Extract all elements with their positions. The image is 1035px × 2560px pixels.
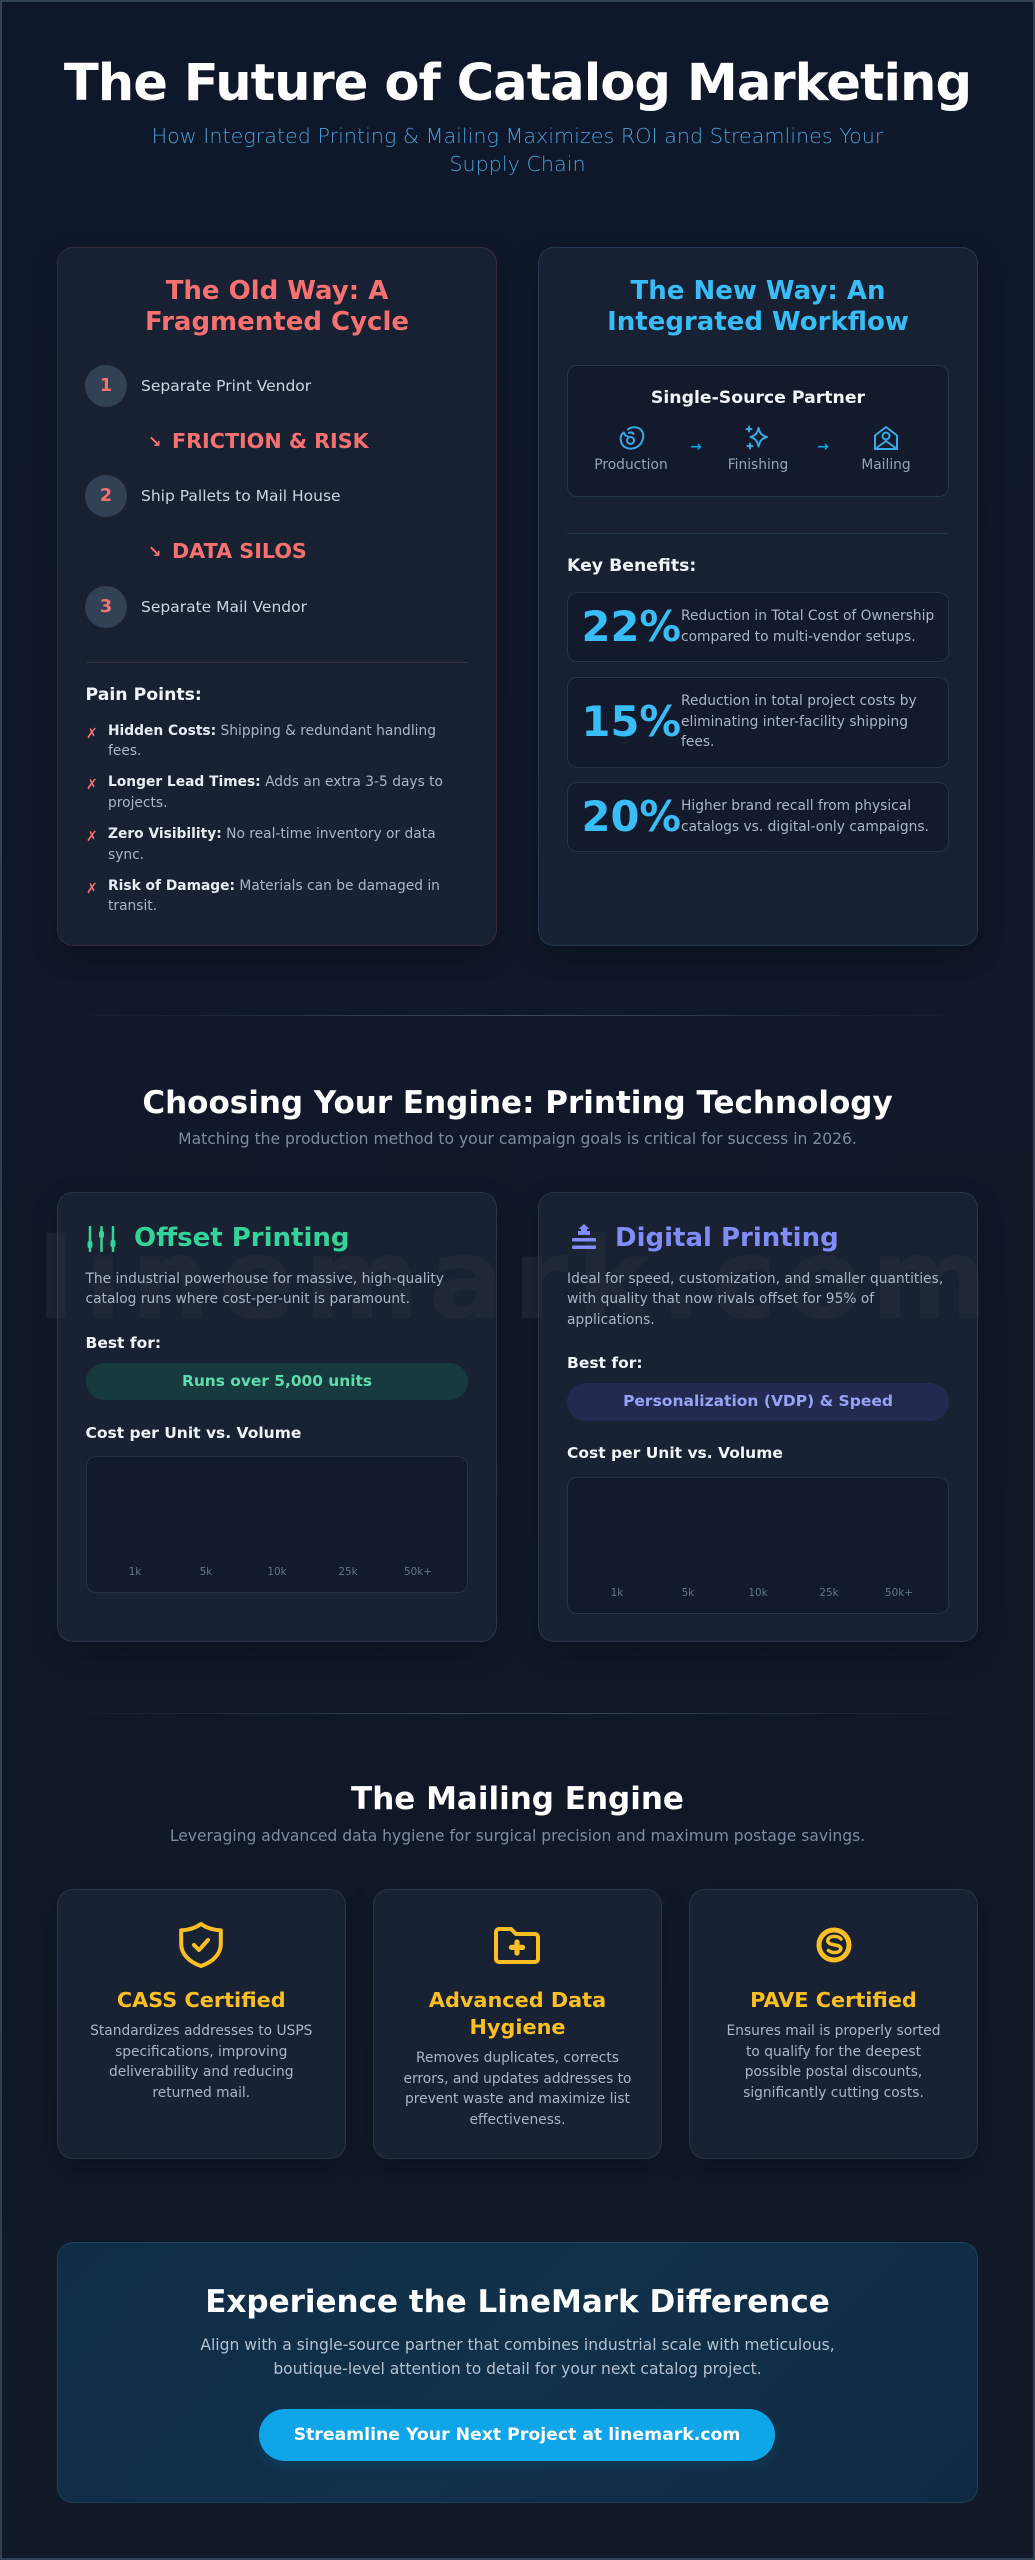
subtitle (152, 124, 884, 176)
cass description: returned mail. (152, 2085, 250, 2101)
section subheading: Leveraging advanced data hygiene for surgical precision and maximum postage savings. (170, 1826, 865, 1844)
icon: sliders (88, 1226, 116, 1252)
description (681, 608, 934, 645)
cta heading: Experience the LineMark Difference (205, 2284, 830, 2320)
hygiene heading (429, 1988, 606, 2039)
panel: pave certified (689, 1889, 978, 2159)
best for pill (567, 1383, 949, 1421)
description: compared to multi-vendor setups. (681, 629, 916, 645)
pain point: lead times: Longer Lead Times: Adds an extra 3-5 days to (108, 774, 443, 790)
digital description: Ideal for speed, customization, and smaller quantities, (567, 1271, 943, 1287)
pave description: to qualify for the deepest (746, 2044, 921, 2060)
axis labels: 50k+ (885, 1587, 913, 1599)
watermark: linemark.com (37, 1215, 996, 1345)
arrow 2: → (817, 439, 829, 455)
panel: cass certified (57, 1889, 346, 2159)
key benefits heading: Key Benefits: (567, 556, 696, 576)
stat: 20% (567, 782, 949, 852)
description: Higher brand recall from physical (681, 798, 911, 814)
friction callout: ↘ (148, 432, 161, 450)
best for pill: Personalization (VDP) & Speed (623, 1392, 893, 1410)
pain point: lead times: projects. (108, 795, 167, 811)
cass description (90, 2023, 312, 2101)
section heading: mailing engine: The Mailing Engine (351, 1781, 684, 1817)
panel: the old way (57, 247, 497, 946)
pain point: hidden costs: ✗ (86, 726, 98, 742)
panel: data hygiene (373, 1889, 662, 2159)
step 1 badge (85, 365, 127, 407)
step 2 label: Ship Pallets to Mail House (141, 487, 341, 505)
description (681, 693, 917, 750)
icon: stamp (572, 1224, 596, 1249)
arrow 1: → (690, 439, 702, 455)
friction callout: FRICTION & RISK (172, 428, 369, 452)
axis labels: 25k (819, 1587, 839, 1599)
digital heading: Digital Printing (615, 1223, 839, 1253)
cta text (200, 2336, 835, 2378)
description: eliminating inter-facility shipping (681, 714, 908, 730)
new way heading: The New Way: An (631, 276, 885, 306)
description: Reduction in total project costs by (681, 693, 917, 709)
offset description: catalog runs where cost-per-unit is paramount. (86, 1291, 410, 1307)
label: finishing: Finishing (728, 457, 788, 473)
description: fees. (681, 734, 714, 750)
offset description: The industrial powerhouse for massive, high-quality (86, 1271, 444, 1287)
pain point: damage: Risk of Damage: Materials can be damaged in (108, 878, 440, 894)
best for pill: Runs over 5,000 units (182, 1372, 372, 1390)
chart heading: Cost per Unit vs. Volume (567, 1444, 783, 1462)
label: mailing: Mailing (861, 457, 911, 473)
pave description: Ensures mail is properly sorted (726, 2023, 940, 2039)
pain point: damage: transit. (108, 898, 157, 914)
value: 15% (582, 697, 681, 746)
cta button (259, 2409, 775, 2461)
section heading: printing technology: Choosing Your Engine: Printing Technology (142, 1085, 893, 1121)
step 3 label: Separate Mail Vendor (141, 598, 307, 616)
cass description: specifications, improving (115, 2044, 287, 2060)
pain points heading: Pain Points: (86, 685, 202, 705)
digital description: applications. (567, 1312, 655, 1328)
axis labels: 50k+ (404, 1566, 432, 1578)
step 1 badge: 1 (100, 376, 112, 396)
hygiene description: Removes duplicates, corrects (416, 2050, 619, 2066)
hygiene description: errors, and updates addresses to (403, 2071, 632, 2087)
hygiene description: effectiveness. (470, 2112, 565, 2128)
axis labels: 25k (338, 1566, 358, 1578)
panel: digital printing (538, 1192, 978, 1642)
pain point: damage: ✗ (86, 881, 98, 897)
old way heading (145, 276, 409, 336)
axis labels: 5k (682, 1587, 694, 1599)
pain point: hidden costs (86, 723, 436, 759)
axis labels: 1k (611, 1587, 623, 1599)
icon: production (620, 426, 644, 450)
new way heading (607, 276, 909, 336)
title: The Future of Catalog Marketing (64, 53, 971, 113)
digital description (567, 1271, 943, 1328)
cta text: boutique-level attention to detail for your next catalog project. (273, 2360, 762, 2378)
hygiene description (403, 2050, 632, 2128)
axis labels: 1k (129, 1566, 141, 1578)
axis labels: 5k (200, 1566, 212, 1578)
pain point: visibility (86, 826, 436, 863)
chart: offset cost (86, 1456, 468, 1593)
panel: offset printing (57, 1192, 497, 1642)
stat: 15% (567, 676, 949, 768)
new way heading: Integrated Workflow (607, 306, 909, 336)
value: 22% (582, 602, 681, 651)
step 2 badge (85, 475, 127, 517)
step 3 badge: 3 (100, 597, 112, 617)
pain point: lead times: ✗ (86, 777, 98, 793)
stat: 22% (567, 592, 949, 662)
offset heading: Offset Printing (134, 1223, 350, 1253)
pave description: possible postal discounts, (745, 2064, 922, 2080)
icon: coin (816, 1928, 852, 1962)
pave description: significantly cutting costs. (743, 2085, 924, 2101)
subtitle: Supply Chain (449, 152, 586, 176)
icon: shield check (179, 1922, 223, 1968)
panel: call to action (57, 2242, 978, 2503)
cass description: Standardizes addresses to USPS (90, 2023, 312, 2039)
axis labels (129, 1566, 432, 1578)
value: 20% (582, 792, 681, 841)
panel: the new way (538, 247, 978, 946)
pain point: visibility: sync. (108, 847, 144, 863)
best for label: Best for: (86, 1334, 161, 1352)
icon: mailing (874, 426, 898, 450)
pain point: hidden costs: fees. (108, 743, 141, 759)
hygiene description: prevent waste and maximize list (405, 2091, 630, 2107)
pain point: damage (86, 878, 440, 914)
cta text: Align with a single-source partner that combines industrial scale with meticulous, (200, 2336, 835, 2354)
icon: folder plus (494, 1927, 540, 1964)
description: Reduction in Total Cost of Ownership (681, 608, 934, 624)
cta button: Streamline Your Next Project at linemark.com (294, 2425, 740, 2445)
step 1 label: Separate Print Vendor (141, 377, 311, 395)
partner heading: Single-Source Partner (651, 388, 865, 408)
data silos callout: DATA SILOS (172, 539, 307, 563)
icon: finishing (746, 426, 768, 450)
cass description: deliverability and reducing (109, 2064, 294, 2080)
digital description: with quality that now rivals offset for 95% of (567, 1291, 874, 1307)
pain point: visibility: ✗ (86, 829, 98, 845)
hygiene heading: Hygiene (470, 2015, 566, 2039)
step 3 badge (85, 586, 127, 628)
offset description (85, 1271, 444, 1307)
chart heading: Cost per Unit vs. Volume (86, 1424, 301, 1442)
axis labels: 10k (267, 1566, 287, 1578)
step 2 badge: 2 (100, 486, 112, 506)
description: catalogs vs. digital-only campaigns. (681, 819, 929, 835)
subtitle: How Integrated Printing & Mailing Maximizes ROI and Streamlines Your (152, 124, 883, 148)
data silos callout: ↘ (148, 542, 161, 561)
pave description (726, 2023, 940, 2101)
pain point: hidden costs: Hidden Costs: Shipping & redundant handling (108, 723, 436, 739)
chart: digital cost (567, 1477, 949, 1614)
label: production: Production (594, 457, 668, 473)
pain point: lead times (86, 774, 443, 811)
pain point: visibility: Zero Visibility: No real-time inventory or data (108, 826, 436, 842)
pave heading: PAVE Certified (750, 1988, 917, 2012)
best for pill (86, 1363, 468, 1400)
description (681, 798, 929, 835)
best for label: Best for: (567, 1354, 643, 1372)
axis labels (611, 1587, 913, 1599)
section subheading: Matching the production method to your campaign goals is critical for success in 2026. (178, 1130, 857, 1148)
old way heading: The Old Way: A (166, 276, 388, 306)
axis labels: 10k (748, 1587, 768, 1599)
hygiene heading: Advanced Data (429, 1988, 606, 2012)
old way heading: Fragmented Cycle (145, 306, 409, 336)
cass heading: CASS Certified (117, 1988, 286, 2012)
single-source partner box (567, 365, 949, 497)
